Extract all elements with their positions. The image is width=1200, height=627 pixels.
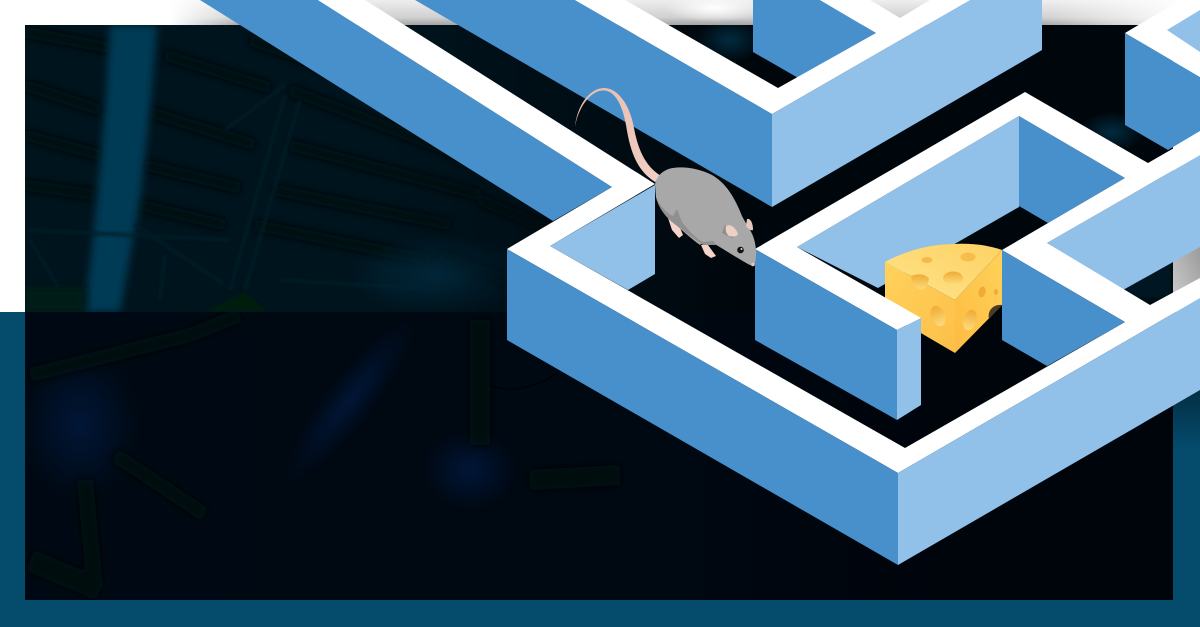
maze: outer wall light face [898, 298, 1200, 565]
maze: right light panel [1047, 155, 1200, 290]
maze: outer wall dark face [507, 249, 898, 565]
mouse nose [751, 263, 755, 266]
grey gap at right edge [1173, 240, 1200, 300]
teal bottom band [0, 312, 1200, 627]
icon: mouse [575, 88, 756, 266]
maze: long left wall dark face [200, 0, 612, 221]
mouse rear leg [668, 218, 683, 238]
mouse ear shadow [722, 225, 738, 238]
icon: cheese wedge [885, 244, 1002, 353]
mouse eye [737, 247, 744, 253]
dark factory photo: upper area [25, 18, 1173, 315]
dark factory photo: lower area with robots [20, 306, 1173, 600]
mouse front leg [701, 245, 716, 258]
maze: upper wall dark face [415, 0, 772, 207]
roof truss lines [92, 100, 300, 239]
maze: top right block [1125, 0, 1200, 150]
maze: upper wall light face [772, 0, 1042, 207]
maze: centre enclosure light panel [797, 116, 1019, 288]
maze: inner short wall end [897, 318, 921, 420]
maze: inner short wall dark face [755, 249, 897, 420]
maze: white walkway tops [318, 0, 1200, 473]
robot arm silhouettes [30, 315, 620, 590]
maze: corner light panel [550, 185, 655, 290]
maze: upper wall white top [575, 0, 970, 114]
mouse ear back [746, 219, 753, 230]
maze: inner right wall dark face [1002, 250, 1125, 366]
mouse tail [575, 88, 663, 182]
darker right part of photo [441, 25, 740, 312]
mouse body [655, 167, 756, 266]
mouse ear front [726, 225, 738, 237]
light column [85, 25, 157, 312]
maze: top centre dark block [753, 0, 876, 79]
maze: centre enclosure dark panel [1019, 116, 1125, 223]
top grey shadow strip [170, 0, 1190, 25]
mouse flank shading [657, 200, 716, 245]
